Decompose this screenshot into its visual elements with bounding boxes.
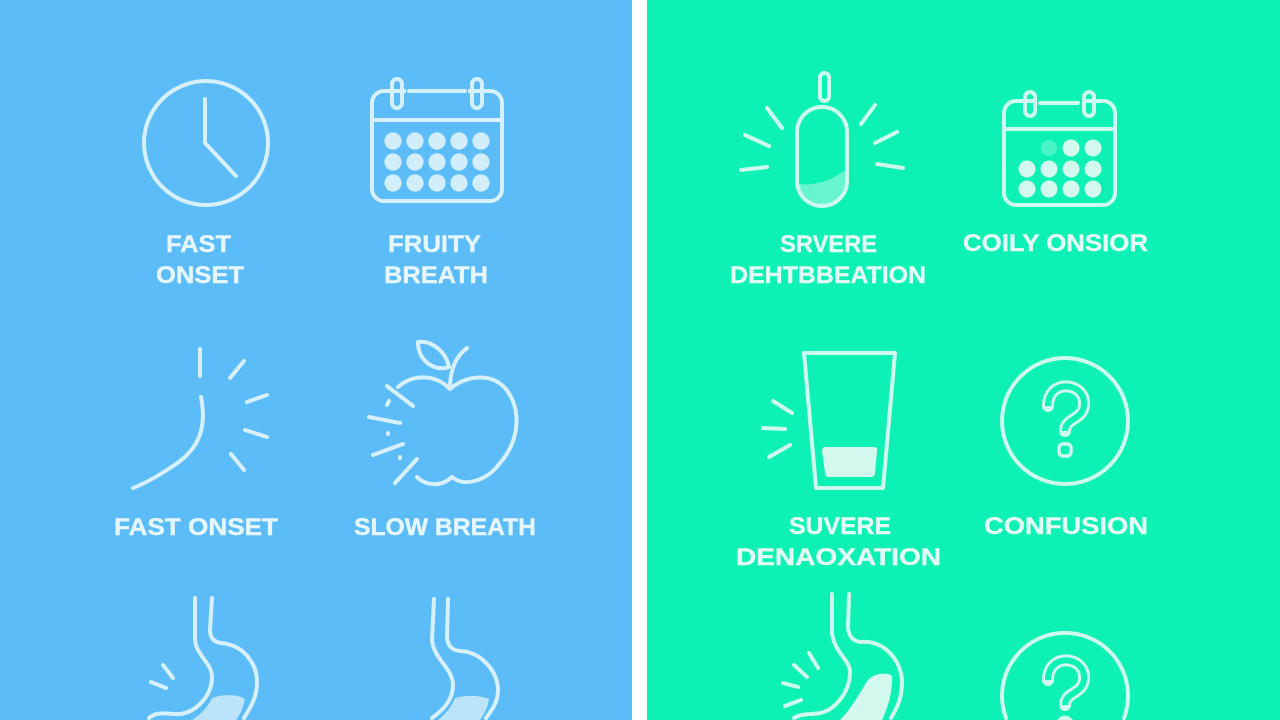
label: fast onset [156, 231, 244, 289]
label: fast onset: FAST [166, 231, 231, 258]
icon: question circle [1002, 358, 1128, 484]
icon: curve with rays [133, 349, 267, 488]
icon: bottle with rays [741, 73, 903, 206]
label: fruity breath: FRUITY [388, 231, 481, 258]
icon: glass of water [763, 353, 895, 488]
icon: question circle lower [1002, 633, 1128, 720]
icon: clock [144, 81, 268, 205]
label: severe dehydration variant garbled [736, 513, 941, 571]
label: fast onset single line: FAST ONSET [114, 514, 278, 541]
icon: calendar [1004, 92, 1115, 205]
icon: apple [369, 342, 516, 484]
label: confusion: CONFUSION [984, 513, 1148, 540]
label: severe dehydration variant garbled: SUVERE [789, 513, 891, 540]
icon: stomach [783, 594, 902, 720]
label: severe dehydration garbled: SRVERE [780, 231, 877, 258]
panel: blue symptoms [0, 0, 632, 720]
label: fruity breath: BREATH [384, 262, 488, 289]
label: severe dehydration garbled [730, 231, 926, 289]
label: severe dehydration garbled: DEHTBBEATION [730, 262, 926, 289]
label: fast onset: ONSET [156, 262, 244, 289]
icon: stomach right [432, 599, 498, 720]
label: fruity breath [384, 231, 488, 289]
label: severe dehydration variant garbled: DENAOXATION [736, 544, 941, 571]
panel: green symptoms [647, 0, 1280, 720]
label: coily onsior: COILY ONSIOR [963, 230, 1148, 257]
icon: calendar [372, 79, 502, 201]
label: slow breath: SLOW BREATH [354, 514, 536, 541]
icon: stomach left [149, 598, 257, 720]
